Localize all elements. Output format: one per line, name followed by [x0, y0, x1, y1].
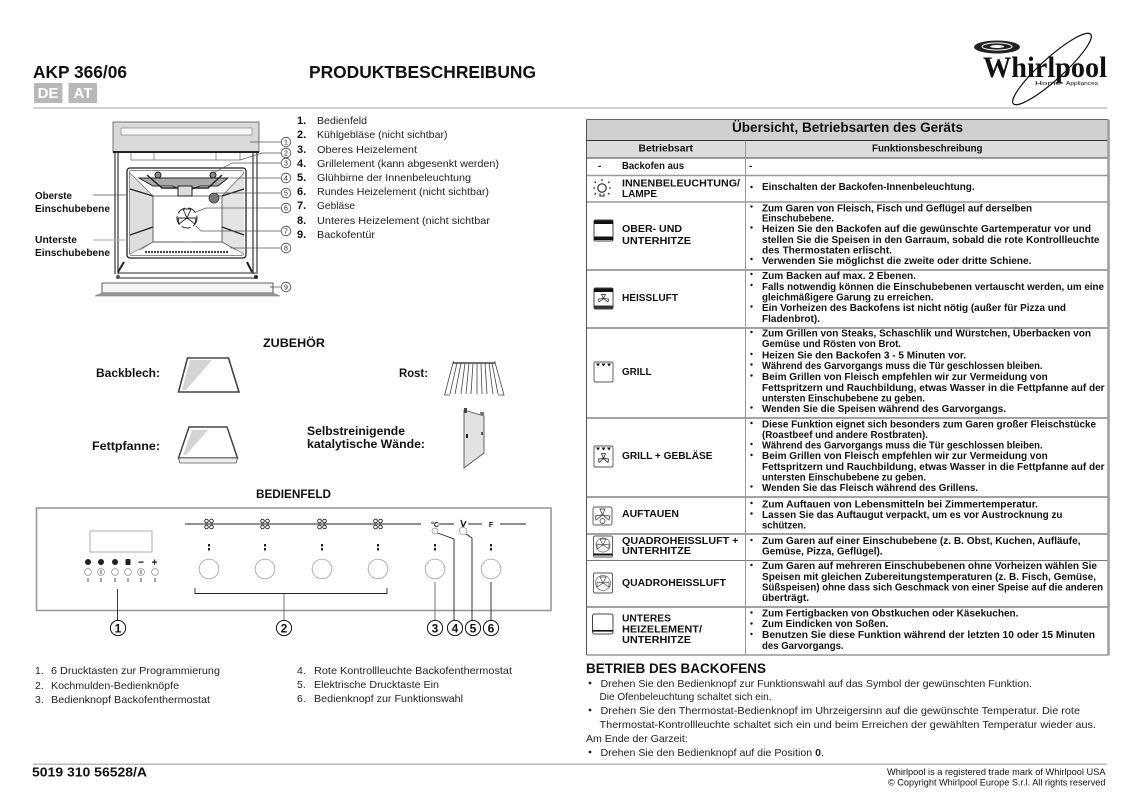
- country badges: DE: [38, 85, 58, 102]
- row: Unteres Heizelement: UNTERES: [622, 614, 671, 624]
- row: Quadroheissluft + Unterhitze: UNTERHITZE: [622, 546, 691, 557]
- row: Grill + Geblaese: [594, 420, 1105, 494]
- row: Unteres Heizelement: des Garvorgangs.: [762, 641, 844, 652]
- row: Ober- und Unterhitze: Zum Garen von Fleisch, Fisch und Geflügel auf derselben: [762, 204, 1032, 214]
- icon: drip pan: [178, 427, 238, 463]
- leader lines: [118, 533, 491, 620]
- labels: shelf levels: Einschubebene: [35, 204, 110, 215]
- list: control panel parts, right: 5.: [297, 679, 306, 691]
- label: catalytic walls: katalytische Wände:: [307, 437, 425, 451]
- label: catalytic walls: [307, 424, 425, 451]
- list: oven parts: Gebläse: [317, 200, 355, 212]
- row: Quadroheissluft: Zum Garen auf mehreren Einschubebenen ohne Vorheizen wählen Sie: [762, 561, 1097, 572]
- display: [90, 531, 152, 552]
- list: oven parts: Rundes Heizelement (nicht sichtbar): [317, 186, 489, 198]
- oven callout numbers: 7: [284, 228, 288, 236]
- row: Heissluft: Fladenbrot).: [762, 314, 820, 325]
- list: oven parts: Kühlgebläse (nicht sichtbar): [317, 129, 448, 141]
- oven callout numbers: [281, 137, 291, 292]
- labels: shelf levels: Einschubebene: [35, 248, 110, 259]
- icon: top and bottom heat: [594, 220, 613, 241]
- icon: bottom heat: [592, 614, 613, 634]
- row: Grill + Geblaese: Wenden Sie das Fleisch während des Grillens.: [762, 483, 978, 494]
- icon: grill with fan: [594, 446, 613, 467]
- list: oven parts: [297, 115, 499, 241]
- row: Auftauen: schützen.: [762, 520, 806, 532]
- fan: [177, 208, 197, 228]
- row: Grill + Geblaese: Fettspritzern und Rauchbildung, etwas Wasser in die Fettpfanne auf der: [762, 462, 1105, 473]
- row: Unteres Heizelement: Benutzen Sie diese Funktion während der letzten 10 oder 15 Minuten: [762, 630, 1095, 641]
- labels: shelf levels: Unterste: [35, 235, 77, 246]
- list: oven parts: Unteres Heizelement (nicht sichtbar: [317, 215, 491, 227]
- oven control panel: [113, 122, 259, 153]
- table column headers: [638, 144, 982, 154]
- row: Grill + Geblaese: Beim Grillen von Fleisch empfehlen wir zur Vermeidung von: [762, 451, 1048, 462]
- row: Ober- und Unterhitze: Verwenden Sie möglichst die zweite oder dritte Schiene.: [762, 256, 1032, 267]
- row: Backofen aus: Backofen aus: [622, 161, 684, 172]
- row: Grill: GRILL: [622, 367, 652, 378]
- icon: lamp: [593, 179, 611, 196]
- label: Fettpfanne: Fettpfanne:: [92, 439, 160, 453]
- logo: Whirlpool: Home: [1035, 81, 1061, 87]
- row: Grill: untersten Einschubebene zu geben.: [762, 394, 925, 404]
- table grid: [586, 120, 1108, 656]
- callout numbers: [110, 620, 499, 636]
- row: Heissluft: gleichmäßigere Garung zu erreichen.: [762, 292, 934, 304]
- thermostat and function symbols: [431, 520, 494, 535]
- list: oven parts: 9.: [297, 229, 306, 241]
- list: control panel parts, right: 6.: [297, 693, 306, 705]
- table: operating modes: [586, 120, 1108, 656]
- oven callout numbers: 2: [284, 150, 288, 158]
- row: Quadroheissluft + Unterhitze: QUADROHEISSLUFT +: [622, 536, 739, 547]
- list: oven parts: Backofentür: [317, 229, 376, 241]
- icon: catalytic panel: [464, 408, 484, 468]
- list: control panel parts, left: 2.: [35, 680, 44, 692]
- label: catalytic walls: Selbstreinigende: [307, 424, 405, 438]
- part number: 5019 310 56528/A: [32, 764, 148, 780]
- list: oven parts: Bedienfeld: [317, 115, 367, 127]
- row: Auftauen: AUFTAUEN: [622, 509, 679, 520]
- list: control panel parts, left: [35, 665, 220, 706]
- row: Grill: Fettspritzern und Rauchbildung, etwas Wasser in die Fettpfanne auf der: [762, 383, 1105, 394]
- list: oven parts: 4.: [297, 158, 306, 170]
- logo: Whirlpool: [974, 26, 1107, 112]
- callout numbers: 4: [452, 622, 459, 636]
- row: Quadroheissluft + Unterhitze: [594, 536, 1081, 558]
- text block: oven operation: Die Ofenbeleuchtung schaltet sich ein.: [600, 691, 772, 703]
- row: Heissluft: HEISSLUFT: [622, 293, 678, 304]
- heading: accessories: ZUBEHÖR: [263, 335, 325, 350]
- oven callout numbers: 8: [284, 246, 288, 252]
- text block: oven operation: Drehen Sie den Bedienknopf auf die Position 0.: [600, 747, 824, 759]
- text block: oven operation: Drehen Sie den Bedienknopf zur Funktionswahl auf das Symbol der gewünschten Funktion.: [600, 678, 1032, 690]
- page title: PRODUKTBESCHREIBUNG: [309, 62, 536, 82]
- list: control panel parts, right: Bedienknopf zur Funktionswahl: [314, 693, 463, 705]
- heading: oven operation: BETRIEB DES BACKOFENS: [586, 661, 766, 676]
- callout numbers: 5: [470, 622, 477, 636]
- row: Heissluft: Zum Backen auf max. 2 Ebenen.: [762, 271, 916, 282]
- row: Quadroheissluft: überträgt.: [762, 593, 809, 604]
- row: Unteres Heizelement: [592, 608, 1095, 652]
- row: Auftauen: Lassen Sie das Auftaugut verpackt, um es vor Austrocknung zu: [762, 510, 1062, 521]
- row: Grill: Zum Grillen von Steaks, Schaschlik und Würstchen, Überbacken von: [762, 326, 1091, 340]
- label: Rost: Rost:: [399, 366, 428, 380]
- oven callout numbers: 1: [284, 140, 288, 146]
- programming buttons: [85, 559, 158, 582]
- text block: oven operation: Drehen Sie den Thermostat-Bedienknopf im Uhrzeigersinn auf die gewünschte Temperatur. Die rote: [600, 705, 1080, 717]
- oven body: [115, 153, 257, 274]
- oven leader lines: [196, 142, 281, 287]
- list: control panel parts, left: 6 Drucktasten zur Programmierung: [51, 665, 220, 677]
- row: Innenbeleuchtung: LAMPE: [622, 189, 657, 200]
- list: oven parts: Oberes Heizelement: [317, 144, 417, 156]
- list: control panel parts, right: Elektrische Drucktaste Ein: [314, 679, 439, 691]
- row: Ober- und Unterhitze: Einschubebene.: [762, 214, 834, 224]
- row: Ober- und Unterhitze: des Thermostaten erlischt.: [762, 246, 892, 256]
- row: Quadroheissluft: QUADROHEISSLUFT: [622, 578, 726, 589]
- row: Grill: Wenden Sie die Speisen während des Garvorgangs.: [762, 404, 1006, 415]
- row: Ober- und Unterhitze: UNTERHITZE: [622, 236, 691, 247]
- list: oven parts: Grillelement (kann abgesenkt werden): [317, 158, 499, 170]
- row: Heissluft: Ein Vorheizen des Backofens ist nicht nötig (außer für Pizza und: [762, 303, 1066, 314]
- country badges: AT: [74, 85, 92, 102]
- list: control panel parts, right: Rote Kontrollleuchte Backofenthermostat: [314, 665, 512, 677]
- control panel diagram: [36, 508, 551, 636]
- list: oven parts: 3.: [297, 144, 306, 156]
- lower heating element: [140, 242, 236, 252]
- row: Auftauen: [593, 500, 1062, 532]
- text block: oven operation: [586, 678, 1096, 759]
- table title: Übersicht, Betriebsarten des Geräts: [732, 120, 963, 135]
- row: Quadroheissluft: Speisen mit gleichen Zubereitungstemperaturen (z. B. Fisch, Gemüse,: [762, 572, 1096, 583]
- row: Unteres Heizelement: UNTERHITZE: [622, 635, 691, 646]
- hob symbols: [205, 519, 382, 529]
- row: Ober- und Unterhitze: Heizen Sie den Backofen auf die gewünschte Gartemperatur vor und: [762, 224, 1091, 235]
- knobs: [199, 559, 501, 579]
- row: Ober- und Unterhitze: OBER- UND: [622, 224, 682, 235]
- callout numbers: 6: [488, 622, 495, 636]
- icon: hot air: [594, 288, 613, 309]
- icon: fan with bottom heat: [594, 536, 612, 557]
- text block: oven operation: Thermostat-Kontrollleuchte schaltet sich ein und beim Erreichen der gewählten Temperatur wieder aus.: [600, 719, 1096, 731]
- list: control panel parts, right: 4.: [297, 665, 306, 677]
- row: Quadroheissluft: Süßspeisen) ohne dass sich Geschmack von einer Speise auf die anderen: [762, 582, 1103, 594]
- knob markers: [209, 544, 491, 550]
- row: Innenbeleuchtung: INNENBELEUCHTUNG/: [622, 178, 740, 190]
- oven callout numbers: 5: [284, 190, 288, 198]
- icon: baking tray: [178, 358, 239, 392]
- list: oven parts: 6.: [297, 186, 306, 198]
- row: Grill: Beim Grillen von Fleisch empfehlen wir zur Vermeidung von: [762, 372, 1048, 383]
- icon: grill: [594, 362, 613, 382]
- list: oven parts: 2.: [297, 129, 306, 141]
- text block: oven operation: Am Ende der Garzeit:: [586, 733, 688, 745]
- row: Ober- und Unterhitze: stellen Sie die Speisen in den Garraum, sobald die rote Kontrollleuchte: [762, 235, 1100, 246]
- table column headers: Funktionsbeschreibung: [872, 144, 982, 154]
- icon: fan: [594, 573, 612, 593]
- row: Backofen aus: -: [598, 161, 601, 172]
- icon: wire rack: [445, 361, 504, 395]
- callout numbers: 1: [115, 622, 122, 636]
- thermostat and function symbols: °C: [431, 521, 439, 529]
- oven callout numbers: 4: [284, 176, 288, 182]
- table column headers: Betriebsart: [638, 144, 694, 154]
- row: Grill + Geblaese: untersten Einschubebene zu geben.: [762, 472, 926, 484]
- callout numbers: 3: [432, 622, 439, 636]
- row: Innenbeleuchtung: [593, 178, 975, 200]
- oven callout numbers: 6: [284, 206, 288, 212]
- list: control panel parts, right: [297, 665, 512, 705]
- country badges: [34, 83, 97, 103]
- symbol line: [185, 523, 526, 525]
- list: oven parts: Glühbirne der Innenbeleuchtung: [317, 172, 471, 184]
- oven callout numbers: 3: [284, 160, 288, 168]
- row: Innenbeleuchtung: Einschalten der Backofen-Innenbeleuchtung.: [762, 182, 975, 193]
- row: Ober- und Unterhitze: [594, 204, 1100, 267]
- list: oven parts: 5.: [297, 172, 306, 184]
- row: Backofen aus: [598, 161, 752, 172]
- row: Backofen aus: -: [749, 161, 752, 172]
- list: oven parts: 7.: [297, 200, 306, 212]
- trademark notice: Whirlpool is a registered trade mark of Whirlpool USA: [887, 767, 1106, 778]
- logo: Whirlpool: Appliances: [1066, 81, 1098, 87]
- row: Grill + Geblaese: (Roastbeef und andere Rostbraten).: [762, 430, 928, 441]
- row: Unteres Heizelement: Zum Eindicken von Soßen.: [762, 619, 889, 630]
- row: Grill: [594, 326, 1105, 415]
- trademark notice: [887, 767, 1106, 788]
- model title: AKP 366/06: [33, 62, 127, 82]
- row: Unteres Heizelement: Zum Fertigbacken von Obstkuchen oder Käsekuchen.: [762, 608, 1019, 620]
- trademark notice: © Copyright Whirlpool Europe S.r.l. All rights reserved: [888, 778, 1106, 788]
- row: Grill + Geblaese: GRILL + GEBLÄSE: [622, 449, 713, 462]
- list: control panel parts, left: Kochmulden-Bedienknöpfe: [51, 680, 179, 692]
- grill element: [139, 172, 228, 196]
- icon: defrost: [593, 507, 612, 525]
- oven door: [95, 262, 280, 296]
- row: Grill: Heizen Sie den Backofen 3 - 5 Minuten vor.: [762, 350, 966, 362]
- row: Unteres Heizelement: HEIZELEMENT/: [622, 624, 702, 636]
- labels: shelf levels: Oberste: [35, 191, 72, 202]
- oven diagram: [95, 122, 291, 296]
- row: Grill: Während des Garvorgangs muss die Tür geschlossen bleiben.: [762, 361, 1043, 372]
- row: Grill: Gemüse und Rösten von Brot.: [762, 339, 901, 350]
- list: control panel parts, left: 3.: [35, 694, 44, 706]
- label: Backblech: Backblech:: [96, 366, 160, 380]
- row: Grill + Geblaese: Diese Funktion eignet sich besonders zum Garen großer Fleischstücke: [762, 420, 1096, 430]
- row: Quadroheissluft + Unterhitze: Zum Garen auf einer Einschubebene (z. B. Obst, Kuchen, Aufläufe,: [762, 536, 1081, 547]
- oven cavity walls: [130, 173, 244, 254]
- row: Quadroheissluft: [594, 561, 1103, 604]
- list: control panel parts, left: Bedienknopf Backofenthermostat: [51, 694, 210, 706]
- oven callout numbers: 9: [284, 284, 288, 292]
- lamp: [209, 193, 219, 203]
- row: Grill + Geblaese: Während des Garvorgangs muss die Tür geschlossen bleiben.: [762, 440, 1043, 452]
- logo: Whirlpool: Whirlpool: [983, 51, 1107, 84]
- list: oven parts: 8.: [297, 215, 306, 227]
- labels: shelf levels: [35, 191, 127, 259]
- list: oven parts: 1.: [297, 115, 306, 127]
- row: Quadroheissluft + Unterhitze: Gemüse, Pizza, Geflügel).: [762, 546, 883, 558]
- thermostat and function symbols: F: [489, 522, 494, 529]
- row: Heissluft: Falls notwendig können die Einschubebenen vertauscht werden, um eine: [762, 282, 1104, 293]
- row: Heissluft: [594, 271, 1104, 325]
- heading: control panel: BEDIENFELD: [256, 487, 331, 501]
- list: control panel parts, left: 1.: [35, 665, 44, 677]
- row: Auftauen: Zum Auftauen von Lebensmitteln bei Zimmertemperatur.: [762, 500, 1038, 510]
- callout numbers: 2: [281, 622, 288, 636]
